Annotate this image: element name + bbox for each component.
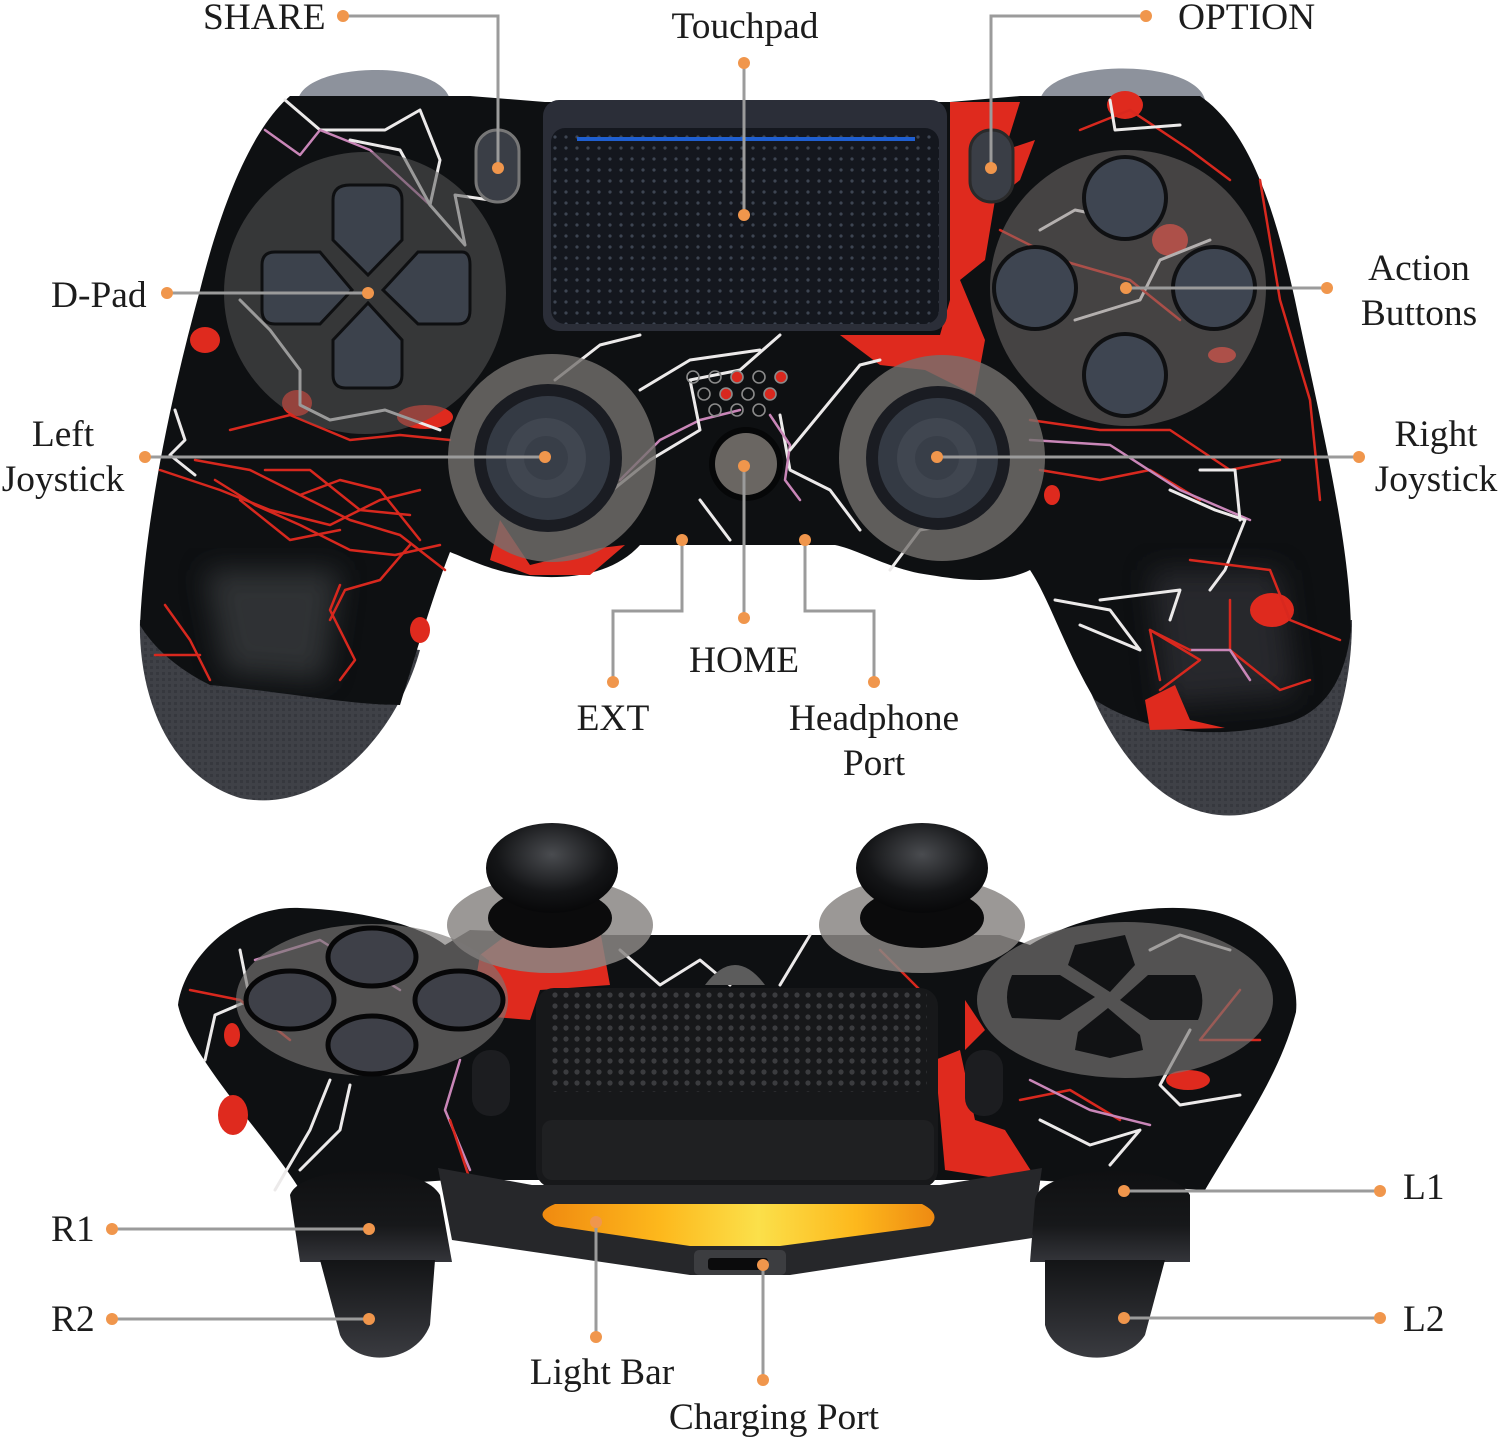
- leader: Action Buttons: [1120, 282, 1333, 294]
- controller body: [140, 96, 1351, 732]
- red paint splashes: [190, 91, 1294, 730]
- label: L1: L1: [1403, 1167, 1445, 1208]
- lightning rear: [190, 935, 1260, 1190]
- label: L2: L2: [1403, 1299, 1445, 1340]
- left thumbstick: [486, 823, 618, 920]
- action button top: [1084, 157, 1166, 239]
- D-pad rear down: [1075, 1008, 1143, 1058]
- D-pad rear: [977, 922, 1273, 1078]
- L1 trigger: [1030, 1171, 1190, 1262]
- label: Right Joystick: Right: [1394, 414, 1478, 455]
- D-pad rear right: [1120, 975, 1202, 1020]
- charging port: [694, 1250, 786, 1275]
- D-pad up: [333, 185, 402, 275]
- leader: Light Bar: [590, 1216, 602, 1343]
- leader: HOME: [738, 460, 750, 624]
- rear button right: [415, 971, 503, 1029]
- label: EXT: EXT: [577, 698, 649, 739]
- R2 trigger: [320, 1260, 435, 1358]
- leader: R2: [106, 1313, 375, 1325]
- left stick base: [447, 877, 653, 973]
- D-pad rear left: [1007, 975, 1095, 1020]
- label: Left Joystick: Left: [32, 414, 95, 455]
- speaker rear: [705, 965, 765, 985]
- rear button left: [246, 971, 334, 1029]
- label: Action Buttons: Action: [1368, 248, 1470, 289]
- label: Touchpad: Touchpad: [672, 6, 819, 47]
- label: R1: R1: [51, 1209, 95, 1250]
- label: Light Bar: Light Bar: [530, 1352, 675, 1393]
- label: HOME: HOME: [689, 640, 799, 681]
- left joystick: [448, 354, 656, 562]
- label: Headphone Port: Port: [843, 743, 906, 784]
- label: Left Joystick: Joystick: [2, 459, 125, 500]
- right grip: [1075, 620, 1352, 816]
- action button right: [1173, 247, 1255, 329]
- action buttons area: [990, 150, 1266, 426]
- leader: Right Joystick: [931, 451, 1365, 463]
- label: R2: R2: [51, 1299, 95, 1340]
- rear option button: [965, 1050, 1003, 1116]
- action button bottom: [1084, 334, 1166, 416]
- leader: SHARE: [337, 10, 504, 174]
- right joystick: [839, 355, 1045, 561]
- rear share button: [472, 1050, 510, 1116]
- speaker holes: [687, 371, 787, 416]
- leader: EXT: [607, 534, 688, 688]
- leader: L2: [1118, 1312, 1386, 1324]
- home button: [709, 427, 783, 501]
- left grip sheen: [205, 570, 340, 680]
- touchpad: [543, 100, 947, 331]
- label: Charging Port: Charging Port: [669, 1397, 880, 1438]
- rear body: [178, 908, 1296, 1190]
- rear button top: [328, 928, 416, 986]
- label: D-Pad: D-Pad: [51, 275, 147, 316]
- label: Action Buttons: Buttons: [1361, 293, 1477, 334]
- D-pad down: [333, 303, 402, 388]
- lightning pattern: [155, 100, 1340, 690]
- share button: [476, 130, 519, 202]
- light bar: [542, 1204, 934, 1246]
- D-pad right: [383, 252, 470, 324]
- L2 trigger: [1045, 1260, 1165, 1358]
- leader: Left Joystick: [139, 451, 551, 463]
- rear button bottom: [328, 1016, 416, 1074]
- D-pad rear up: [1068, 935, 1135, 992]
- bottom controller: [178, 823, 1296, 1358]
- leader: R1: [106, 1223, 375, 1235]
- leader: Touchpad: [738, 57, 750, 221]
- left shoulder button: [298, 70, 450, 100]
- right grip sheen: [1150, 570, 1295, 705]
- rear band: [438, 1168, 1042, 1275]
- right thumbstick: [856, 823, 988, 920]
- action button left: [994, 247, 1076, 329]
- R1 trigger: [290, 1171, 452, 1262]
- label: Right Joystick: Joystick: [1375, 459, 1498, 500]
- rear touchpad: [536, 988, 938, 1188]
- leader: L1: [1118, 1185, 1386, 1197]
- red splashes rear: [218, 925, 1210, 1185]
- left grip: [140, 620, 420, 800]
- top controller: [140, 68, 1352, 816]
- leader: OPTION: [985, 10, 1152, 174]
- leader: Charging Port: [757, 1259, 769, 1386]
- leader: D-Pad: [161, 287, 374, 299]
- label: Headphone Port: Headphone: [789, 698, 959, 739]
- leader: Headphone Port: [799, 534, 880, 688]
- D-pad left: [262, 252, 352, 324]
- action buttons rear: [236, 924, 508, 1076]
- right shoulder button: [1040, 68, 1205, 100]
- right stick base: [819, 877, 1025, 973]
- option button: [970, 130, 1013, 202]
- D-pad area: [224, 152, 506, 434]
